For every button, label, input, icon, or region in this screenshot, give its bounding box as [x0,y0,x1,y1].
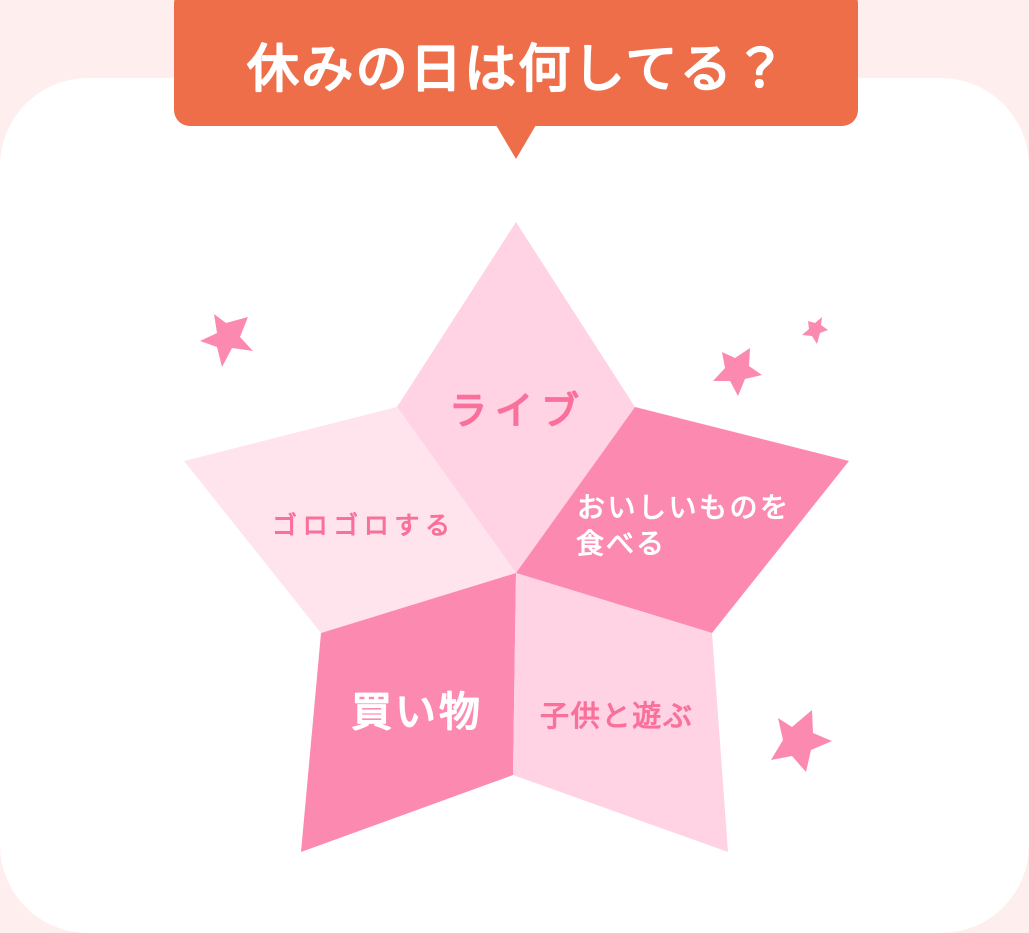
segment: playing with kids [513,573,728,852]
segment: live [397,222,635,573]
icon: star small top right [802,317,828,344]
icon: star bottom right [771,710,832,772]
title: 休みの日は何してる？ [247,41,786,99]
segment: lounging [184,407,516,633]
segment: eating: 食べる [576,528,664,559]
title banner [174,0,858,159]
segment: shopping [301,573,516,852]
segment: playing with kids: 子供と遊ぶ [540,700,692,733]
segment: eating [516,407,849,633]
segment: eating: おいしいものを [577,492,788,523]
segment: shopping: 買い物 [351,689,480,735]
segment: lounging: ゴロゴロする [272,512,450,540]
icon: star top left [200,314,253,367]
star chart [184,222,849,852]
segment: live: ライブ [449,391,579,433]
icon: star upper right [713,348,762,396]
